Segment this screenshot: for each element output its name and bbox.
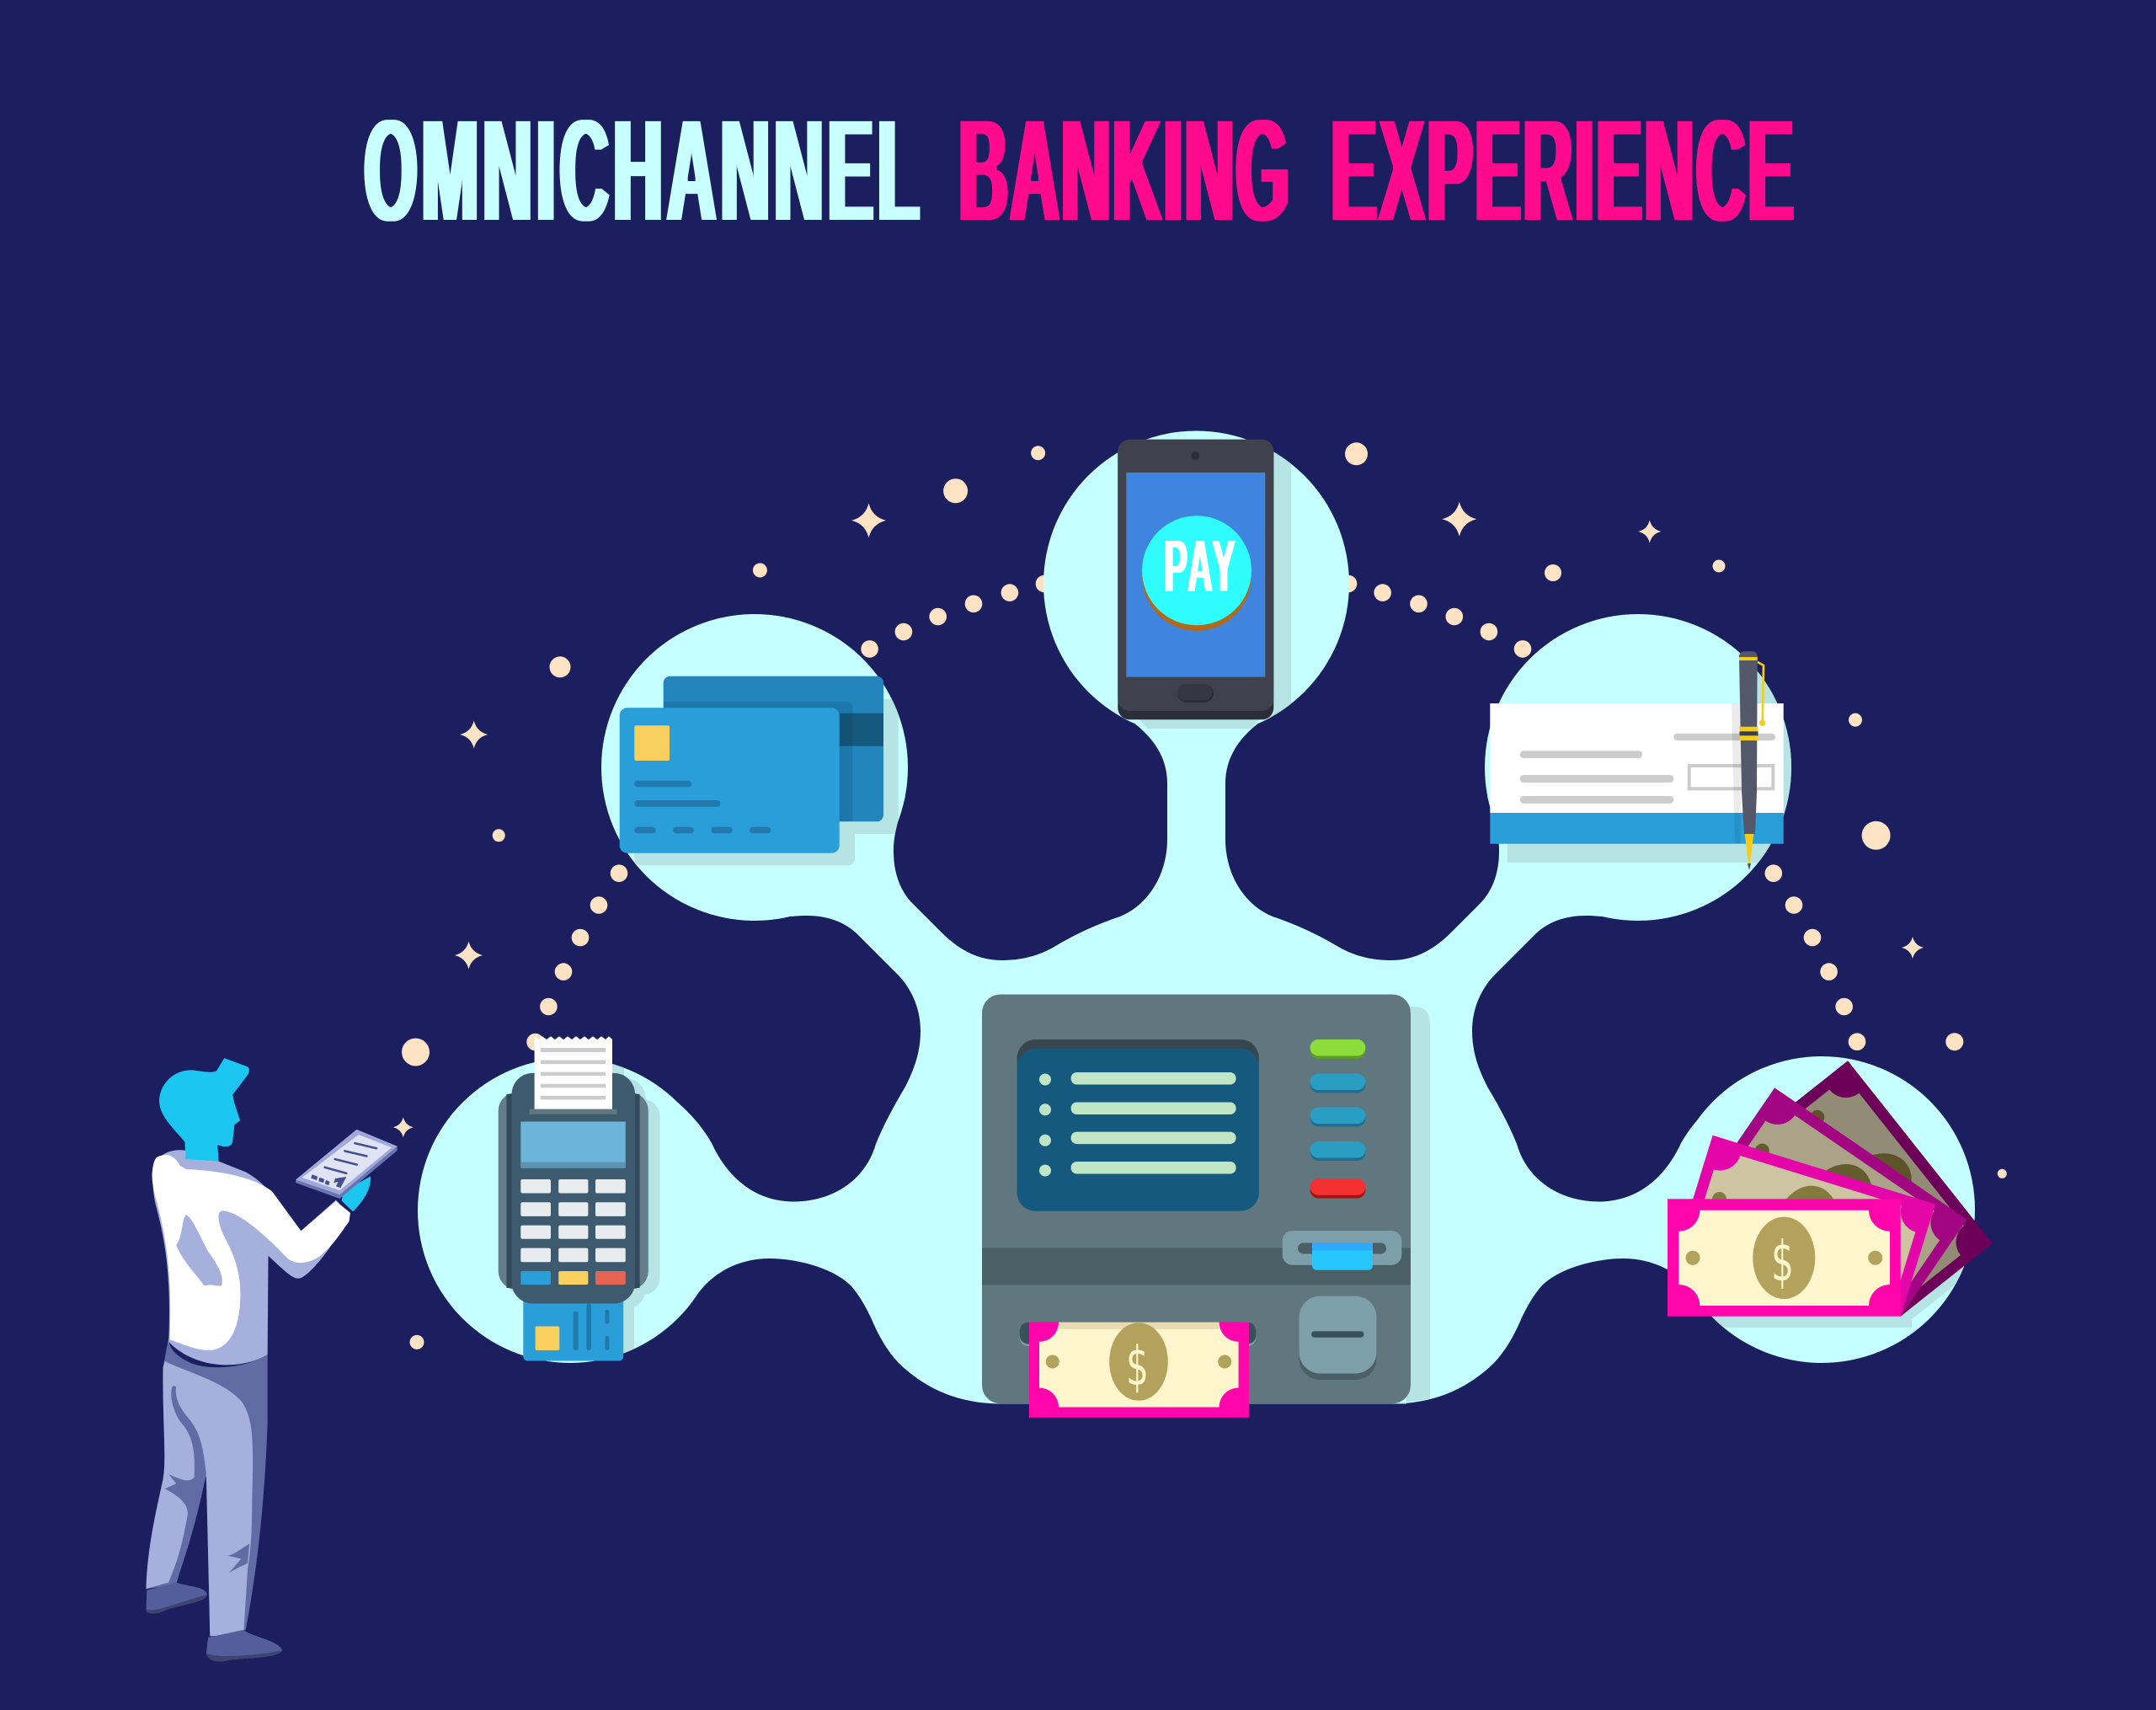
title — [364, 88, 1794, 254]
icon: payment terminal with receipt and card — [499, 1036, 660, 1361]
back note 1 — [1678, 1136, 1935, 1317]
ATM screen — [1017, 1039, 1259, 1211]
icon: fan of banknotes — [1668, 1061, 1993, 1328]
front note: $ — [1771, 1229, 1794, 1294]
title: BANKING — [958, 88, 1289, 254]
title: OMNICHANNEL — [364, 88, 919, 254]
receipt button — [1299, 1296, 1376, 1380]
connected network blob — [418, 431, 1975, 1403]
cheque text lines — [1520, 734, 1775, 804]
back note 2 — [1708, 1087, 1967, 1317]
icon: cheque and pen — [1490, 651, 1802, 870]
icon: credit cards — [620, 676, 899, 865]
head — [159, 1058, 249, 1162]
icon: ATM machine — [982, 994, 1430, 1418]
receipt — [535, 1036, 612, 1109]
card slot — [1283, 1231, 1401, 1270]
keypad — [520, 1179, 626, 1285]
title: EXPERIENCE — [1331, 88, 1794, 254]
back note 3 — [1756, 1061, 1993, 1317]
pay label: PAY — [1164, 524, 1235, 608]
shoes — [146, 1583, 282, 1661]
pen — [1739, 651, 1765, 870]
sparkle stars — [393, 502, 1924, 1137]
trousers — [146, 1338, 268, 1636]
hand — [342, 1176, 371, 1211]
dotted arcs and scattered dots — [402, 442, 2007, 1349]
front note — [1668, 1199, 1901, 1317]
shirt — [152, 1150, 350, 1365]
tablet — [296, 1130, 398, 1199]
inserted card — [536, 1304, 609, 1350]
banknote in dispenser: $ — [1126, 1336, 1149, 1398]
icon: smartphone with pay button — [1118, 440, 1291, 729]
ATM buttons — [1310, 1039, 1365, 1198]
banknote in dispenser — [1029, 1323, 1249, 1418]
person holding a tablet — [146, 1058, 398, 1661]
